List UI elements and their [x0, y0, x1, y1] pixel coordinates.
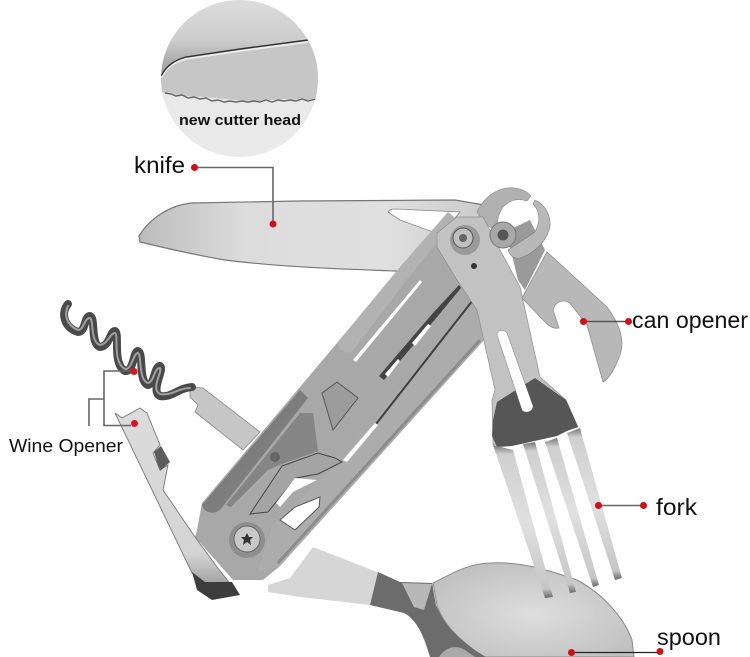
tine 2: [523, 442, 576, 593]
knife blade: [139, 200, 490, 272]
tine 4: [567, 428, 622, 580]
body lower bolt: [229, 522, 265, 558]
fork arm: [437, 217, 578, 445]
white wedge: [276, 478, 317, 507]
label: spoon: spoon: [657, 624, 721, 650]
multi-tool body: [195, 212, 520, 580]
can opener ring: [477, 188, 550, 290]
white slit: [353, 280, 422, 362]
corkscrew lever arm: [190, 387, 260, 450]
label: wine opener: [9, 368, 138, 456]
pin dot: [270, 452, 280, 462]
label: fork: [595, 494, 698, 520]
small pin: [471, 263, 477, 269]
caption: new cutter head: new cutter head: [179, 112, 301, 129]
fork dark head: [492, 378, 578, 447]
upper outer rail: [337, 212, 456, 353]
can opener blade: [522, 252, 622, 382]
inset: new cutter head magnified circle: [160, 0, 320, 157]
lever notch: [154, 446, 170, 471]
long right strip: [258, 300, 484, 572]
centre slot dark: [379, 285, 461, 380]
long dark groove: [376, 300, 473, 424]
lever dark hinge: [192, 572, 240, 600]
label: can opener: [580, 307, 748, 333]
spoon: [268, 547, 634, 657]
dark cavity: [226, 413, 318, 507]
lower outer rail: [202, 390, 308, 513]
wine opener lever: [115, 408, 240, 600]
corkscrew spiral: [64, 304, 192, 396]
tine 3: [545, 438, 599, 587]
label: spoon: [568, 624, 721, 656]
washer stack: [505, 220, 545, 290]
spoon bowl: [433, 563, 634, 657]
spoon handle: [268, 547, 475, 657]
spoon dark neck band: [370, 572, 486, 657]
inner white slit: [343, 423, 378, 462]
head bolt: [450, 225, 480, 255]
label: wine opener: Wine Opener: [9, 435, 123, 456]
fork and handle: [437, 217, 622, 598]
label: can opener: can opener: [632, 307, 748, 333]
upper pentagon hole: [322, 382, 358, 430]
label: knife: knife: [134, 152, 185, 178]
body frame: [195, 212, 520, 580]
fork slot: [497, 331, 533, 412]
knife slot: [388, 209, 460, 232]
second bolt: [490, 222, 516, 248]
curved arm: [250, 453, 342, 514]
tine 1: [493, 445, 553, 598]
label: knife: [134, 152, 276, 228]
lower triangular hole: [280, 497, 320, 530]
label: fork: fork: [656, 494, 698, 520]
